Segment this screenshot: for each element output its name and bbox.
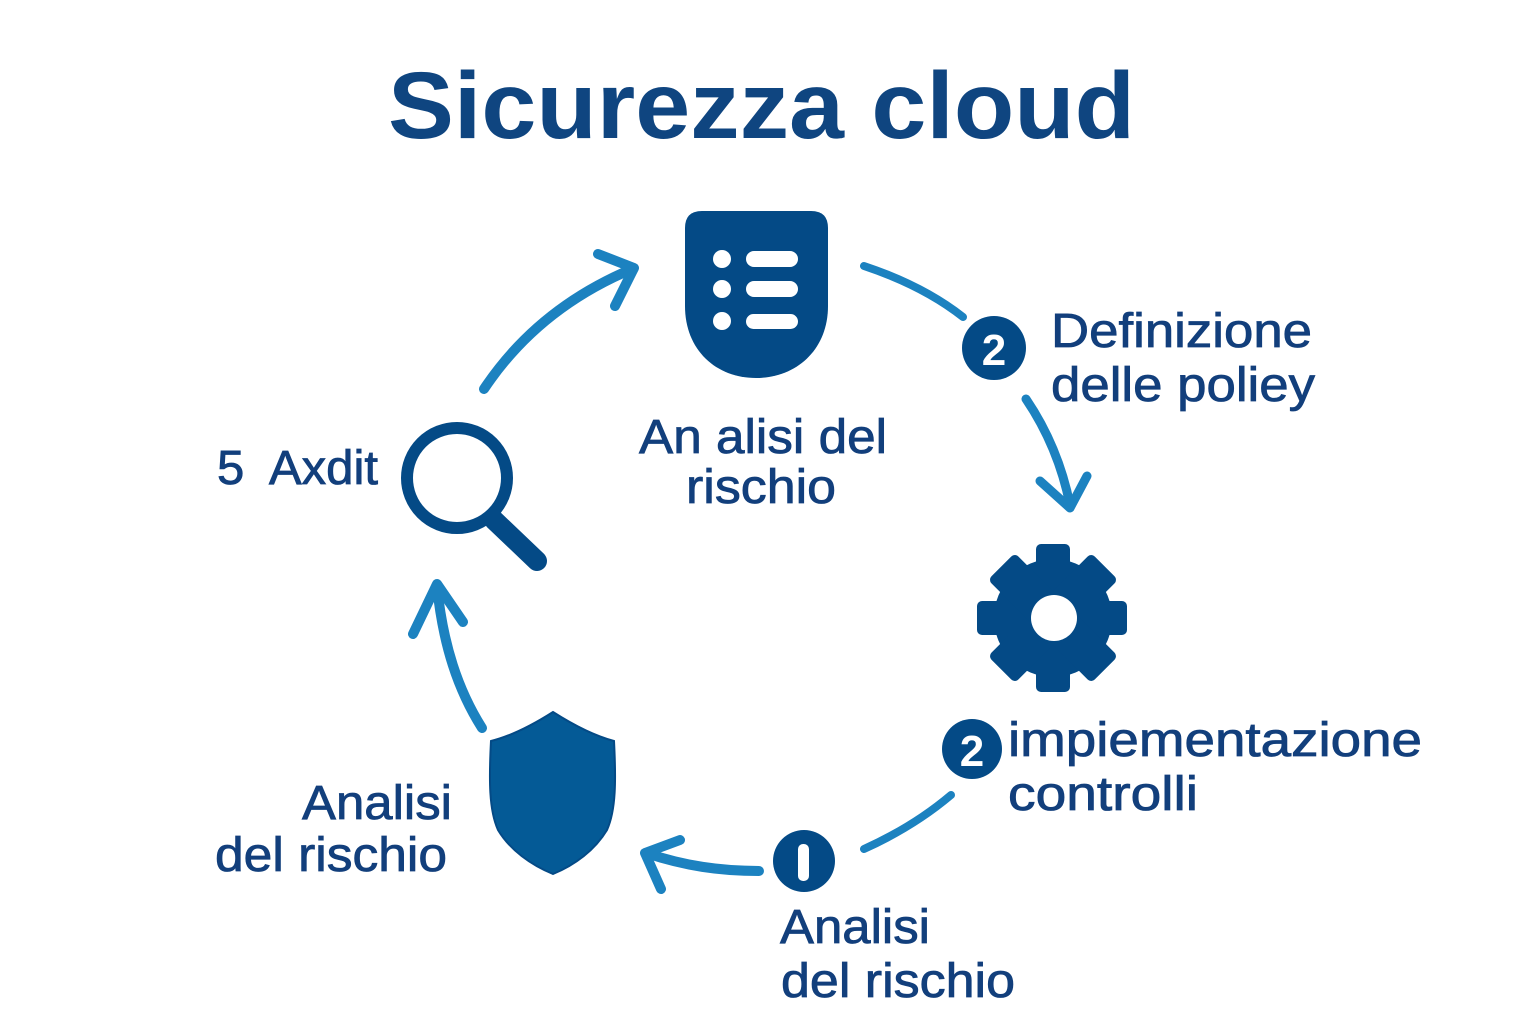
title: Sicurezza cloud [388, 53, 1135, 159]
arrow: top icon to step 2 [864, 266, 963, 317]
label: policy definition: Definizione [1051, 305, 1312, 358]
label: risk analysis top: rischio [686, 461, 836, 514]
badge: number 3 [942, 719, 1002, 779]
label: policy definition [1051, 305, 1315, 412]
arrow: magnifier to top icon [484, 254, 634, 389]
label: controls implementation [1008, 714, 1422, 821]
arrow: step 1 to shield [645, 840, 759, 889]
arrow: step 3 to step 1 [864, 795, 951, 849]
label: risk analysis bottom [780, 901, 1015, 1008]
label: risk analysis left: Analisi [302, 777, 452, 830]
label: policy definition: delle poliey [1051, 359, 1315, 412]
badge: number 2 [962, 316, 1026, 380]
label: risk analysis left [215, 777, 452, 882]
badge: number 2: 2 [982, 326, 1006, 375]
icon: magnifier [407, 428, 537, 561]
badge: number 1 [773, 830, 835, 892]
icon: shield [490, 712, 615, 874]
label: risk analysis top: An alisi del [639, 411, 887, 464]
label: risk analysis top [639, 411, 887, 514]
label: risk analysis bottom: Analisi [780, 901, 930, 954]
label: controls implementation: controlli [1008, 768, 1198, 821]
icon: gear [977, 544, 1127, 692]
label: audit: 5 Axdit [217, 442, 378, 495]
arrow: shield to magnifier [413, 584, 482, 728]
label: risk analysis bottom: del rischio [781, 955, 1015, 1008]
badge: number 3: 2 [960, 727, 984, 776]
label: risk analysis left: del rischio [215, 829, 447, 882]
icon: risk analysis checklist shield [685, 211, 828, 378]
label: controls implementation: impiementazione [1008, 714, 1422, 767]
arrow: step 2 to gear [1026, 399, 1087, 508]
